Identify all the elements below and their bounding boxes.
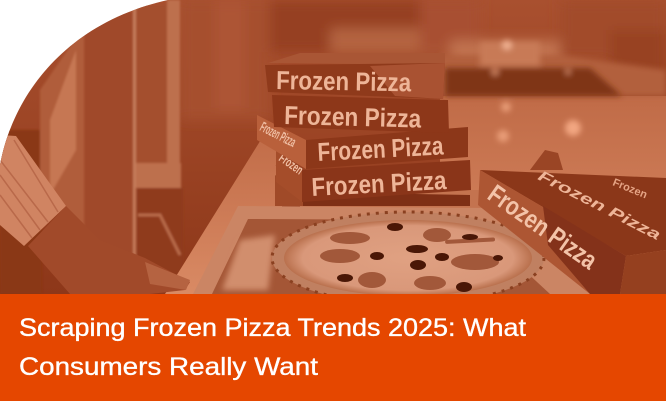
box 4 — [276, 150, 471, 202]
title: Scraping Frozen Pizza Trends 2025: What — [19, 314, 526, 342]
box 1 — [265, 53, 445, 99]
olives — [337, 223, 503, 292]
box 1: Frozen Pizza — [276, 65, 412, 97]
box 4: Frozen — [276, 150, 306, 177]
stack of pizza boxes — [257, 53, 471, 206]
box 5 — [275, 165, 470, 206]
title — [19, 314, 526, 381]
box 2: Frozen Pizza — [284, 100, 422, 134]
oven door panels — [0, 0, 182, 266]
panel: toned photo of pizza boxes — [0, 0, 666, 304]
box 3: Frozen Pizza — [317, 130, 445, 167]
back-counter bokeh — [445, 40, 622, 142]
box 3 — [257, 115, 468, 169]
pizza box on the right — [478, 150, 666, 294]
back counter — [440, 96, 666, 294]
pizza box on the right: Frozen — [611, 177, 649, 201]
title band — [0, 294, 666, 401]
pizza box on the right: Frozen Pizza — [535, 167, 663, 244]
toppings — [320, 228, 499, 290]
arm with sleeve — [0, 135, 190, 294]
title: Consumers Really Want — [19, 353, 318, 381]
counter shade under stack — [300, 191, 481, 208]
marble counter — [165, 128, 282, 294]
pizza — [272, 212, 544, 304]
blurred kitchen background — [180, 0, 666, 120]
box 3: Frozen Pizza — [258, 118, 299, 150]
pizza box on the right: Frozen Pizza — [483, 178, 603, 275]
baking tray — [193, 206, 590, 294]
box 4: Frozen Pizza — [311, 165, 448, 202]
